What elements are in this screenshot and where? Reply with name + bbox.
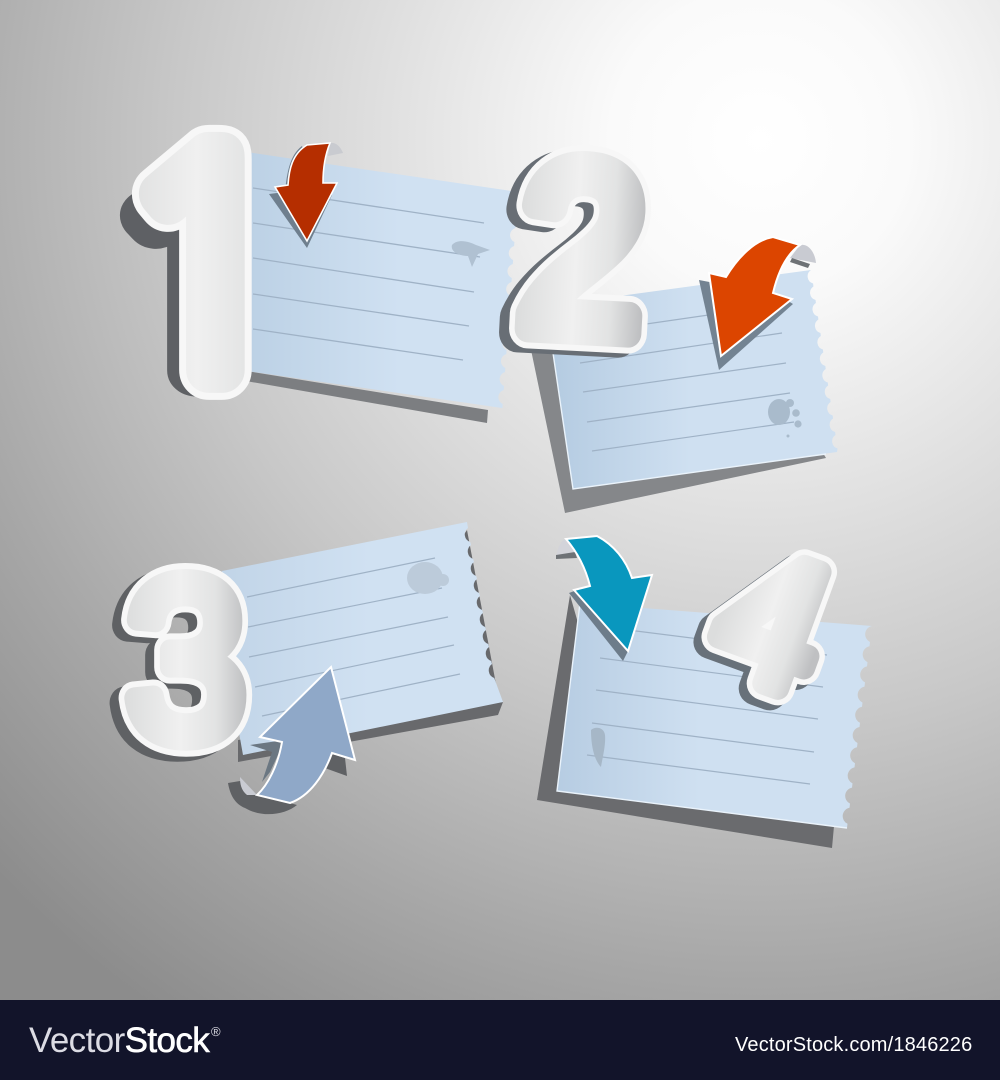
red arrow shadow [269,146,332,248]
red arrow curl [328,143,343,156]
arrow: red [269,143,343,248]
steel arrow curl shadow [228,781,297,814]
note 3 paper [222,522,503,755]
note 1 paper [240,151,518,408]
steel arrow head shadow [322,754,347,776]
note 2 paper [546,270,838,489]
note 3 stain [407,562,449,594]
red arrow body [275,143,337,241]
arrow: teal [556,536,652,661]
note 4 paper [557,603,872,828]
numeral 2 [504,113,651,389]
numeral 3 shadow: 3 [117,538,237,791]
note 2 stain [768,399,802,438]
footer bar [0,1000,1000,1080]
teal arrow curl shadow [556,552,577,559]
numeral 4 white rim: 4 [692,510,854,733]
numeral 4 shadow: 4 [684,515,846,738]
note 3 bite shadow [463,530,499,708]
numeral 1 [103,118,297,417]
numeral 3 face: 3 [126,533,246,786]
note 4 ruled lines [587,627,827,784]
note 4 stain [591,728,605,767]
numeral 1 face: 1 [115,118,297,417]
teal arrow curl [556,539,577,558]
note 2 shadow [530,300,826,513]
numeral 2 shadow: 2 [504,117,641,389]
footer logo: VectorStock [29,1021,209,1060]
note 3 shadow [238,702,503,762]
numeral 2 white rim: 2 [514,113,651,385]
panel: note 1 [240,151,518,423]
note 3 ruled lines [247,558,460,716]
note 1 ruled lines [253,188,484,360]
footer image reference: VectorStock.com/1846226 [735,1034,972,1056]
note 2 ruled lines [577,305,794,451]
orange arrow body [709,237,800,356]
orange arrow curl shadow [790,258,810,268]
note 4 shadow [537,595,834,848]
note 1 shadow [240,370,488,423]
numeral 4 face: 4 [692,510,854,733]
numeral 1 white rim: 1 [115,118,297,417]
numeral 3 white rim: 3 [126,533,246,786]
note 1 stain [452,241,490,267]
panel: note 3 [222,522,503,762]
numeral 3 [117,533,246,791]
panel: note 4 [537,595,872,848]
note 2 edge highlight [553,353,826,489]
orange arrow curl [790,245,816,263]
arrow: orange [699,237,816,370]
footer logo: ® [211,1024,220,1039]
teal arrow body [566,536,652,651]
panel: note 2 [530,270,838,513]
arrow: steel blue [228,667,355,814]
steel arrow body [257,667,355,803]
note 4 edge highlight [557,603,847,828]
teal arrow shadow [569,590,628,661]
steel arrow shaft shadow [250,740,285,782]
numeral 4 [684,510,854,738]
orange arrow shadow [699,280,793,370]
numeral 2 face: 2 [514,113,651,385]
steel arrow curl [240,777,257,795]
numeral 1 shadow: 1 [103,148,285,411]
